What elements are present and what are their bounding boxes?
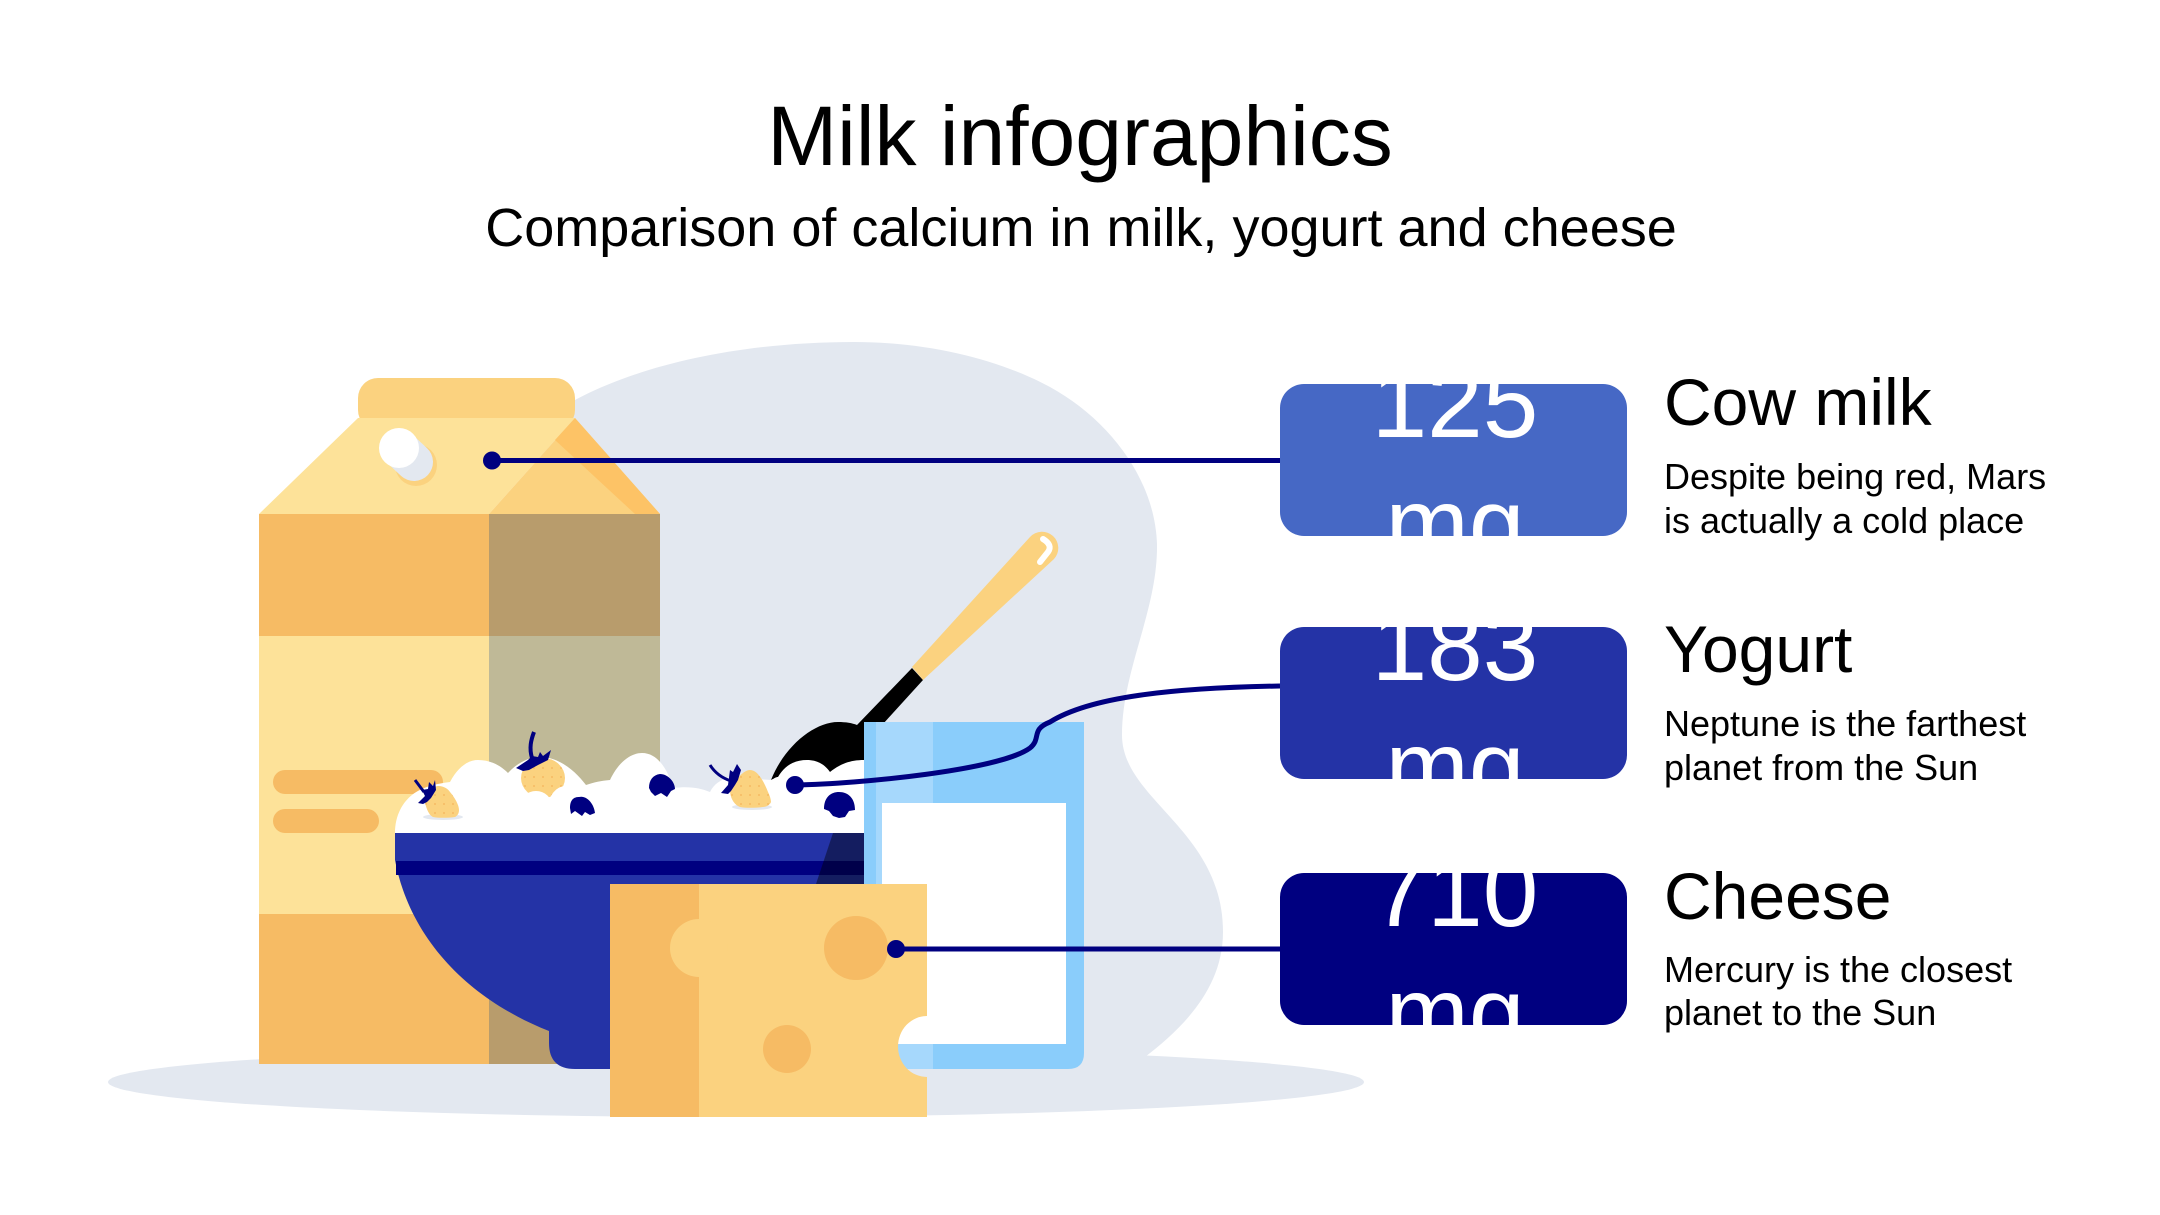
label: cheese xyxy=(1664,859,2012,1033)
strawberry 2 xyxy=(516,732,584,830)
label: cow milk: Despite being red, Mars xyxy=(1664,456,2046,497)
leader line: cheese xyxy=(887,940,1280,958)
value box: cow milk: 125 xyxy=(1372,347,1538,459)
icon: cream and toppings xyxy=(395,732,864,833)
label: cheese: Cheese xyxy=(1664,859,1892,933)
strawberry 1 xyxy=(415,780,463,820)
icon: bowl xyxy=(395,833,864,1069)
label: yogurt: Neptune is the farthest xyxy=(1664,703,2026,744)
value box: cow milk: mg xyxy=(1386,468,1524,580)
label: cheese: planet to the Sun xyxy=(1664,992,1936,1033)
value box: cheese xyxy=(1280,873,1627,1025)
icon: glass of milk xyxy=(864,722,1084,1069)
icon: milk carton xyxy=(259,378,660,1064)
blueberry 1 xyxy=(570,797,595,816)
title: Milk infographics xyxy=(767,89,1393,183)
leader line: yogurt xyxy=(786,686,1280,794)
blueberry 3 xyxy=(824,792,855,818)
value box: yogurt: mg xyxy=(1386,711,1524,823)
label: cow milk: Cow milk xyxy=(1664,365,1933,439)
ground shadow xyxy=(108,1047,1364,1117)
label: cow milk xyxy=(1664,365,2046,541)
value box: cow milk xyxy=(1280,384,1627,536)
value box: yogurt xyxy=(1280,627,1627,779)
value box: yogurt: 183 xyxy=(1372,590,1538,702)
leader line: cow milk xyxy=(483,452,1280,470)
label: yogurt: Yogurt xyxy=(1664,612,1852,686)
label: yogurt xyxy=(1664,612,2026,788)
icon: spoon xyxy=(771,532,1058,780)
label: cow milk: is actually a cold place xyxy=(1664,500,2024,541)
blueberry 2 xyxy=(649,774,675,797)
strawberry 3 xyxy=(710,764,772,810)
background blob xyxy=(500,342,1223,1066)
subtitle: Comparison of calcium in milk, yogurt and cheese xyxy=(485,198,1677,258)
label: cheese: Mercury is the closest xyxy=(1664,949,2012,990)
icon: cheese xyxy=(610,884,927,1117)
value box: cheese: 710 xyxy=(1372,836,1538,948)
value box: cheese: mg xyxy=(1386,957,1524,1069)
label: yogurt: planet from the Sun xyxy=(1664,747,1978,788)
